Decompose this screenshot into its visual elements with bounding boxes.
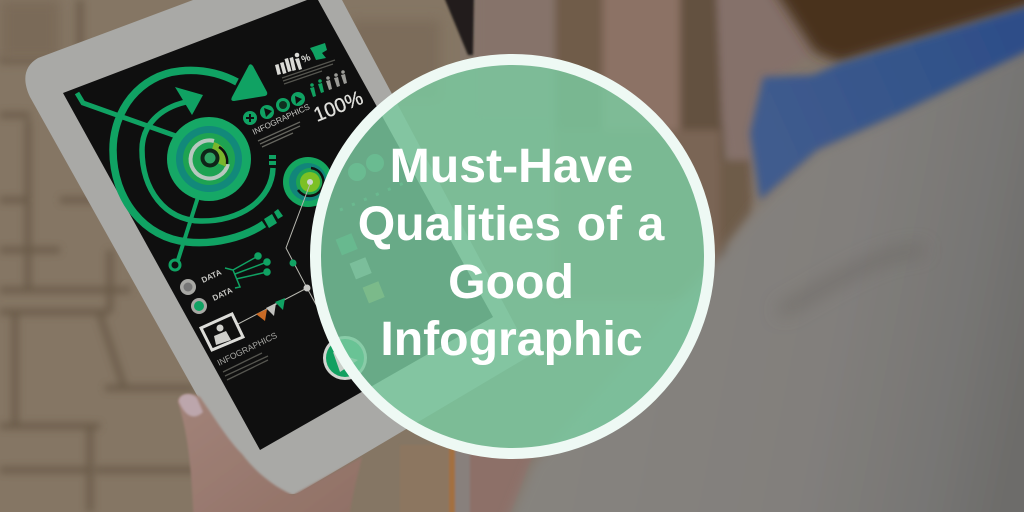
tablet screen (63, 0, 493, 450)
flow line with arrows (238, 184, 330, 330)
shirt (505, 40, 1024, 512)
bottom round badge (323, 336, 367, 380)
monitor icon (201, 314, 243, 350)
tablet body (25, 0, 531, 494)
hand holding tablet (178, 394, 362, 512)
connector line from top left (77, 93, 176, 136)
title: Must-Have (390, 139, 633, 193)
bench planks (475, 0, 815, 300)
infographics heading, bottom: INFOGRAPHICS (215, 330, 279, 368)
shirt crease (780, 250, 925, 312)
data pins: DATA (200, 268, 223, 285)
paving bricks (0, 0, 200, 512)
central circle badge (316, 60, 710, 454)
fingernail (179, 394, 203, 417)
title: Infographic (380, 312, 643, 366)
dark gap behind tablet (441, 0, 474, 55)
title (358, 139, 665, 366)
data pins (180, 268, 234, 314)
central target disc (167, 117, 251, 201)
green circle icons (243, 92, 305, 125)
ghost icons under circle (336, 154, 430, 303)
row of people icons (310, 70, 347, 97)
data pins: DATA (211, 286, 234, 303)
blue collar (750, 0, 1024, 200)
small node icon (170, 260, 180, 270)
line down to small node (178, 197, 198, 260)
person: shirt shoulder, collar and head (505, 0, 1024, 512)
top chart icons (275, 43, 335, 84)
infographics heading, top: INFOGRAPHICS (251, 102, 312, 137)
inner arc with arrow (142, 87, 276, 221)
100% label: 100% (311, 87, 367, 127)
second target disc (283, 157, 333, 207)
top chart icons: % (300, 52, 312, 66)
bench foot (400, 445, 535, 512)
title: Good (448, 255, 574, 309)
data tree connector (225, 253, 270, 288)
title: Qualities of a (358, 197, 665, 251)
big outer arc with arrow (113, 64, 283, 243)
head shadow (768, 0, 1024, 62)
